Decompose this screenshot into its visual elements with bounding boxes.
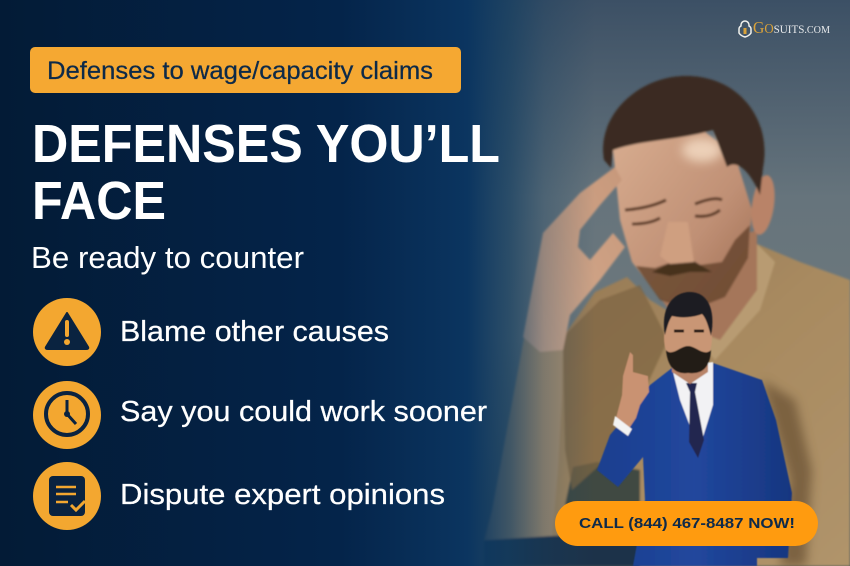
title (32, 114, 500, 231)
photo: man with headache (484, 76, 850, 566)
man's neck (640, 230, 757, 340)
logo (739, 18, 830, 37)
sweater shadow folds (563, 285, 668, 490)
subtitle: Be ready to counter (31, 240, 304, 275)
lawyer's hair (664, 292, 712, 336)
man's ear (748, 174, 778, 236)
man's sweater (484, 244, 850, 566)
lawyer's beard (666, 346, 711, 373)
sweater collar (690, 244, 775, 360)
jeans (484, 532, 640, 566)
lawyer's eyes (674, 330, 704, 332)
lawyer's neck (672, 355, 708, 384)
logo lock icon (739, 21, 751, 37)
man's mustache (652, 260, 712, 276)
man's hair (603, 76, 765, 195)
sleeve (486, 338, 563, 542)
man's hand (523, 167, 625, 352)
logo text: GOSUITS.COM (753, 18, 830, 37)
badge (30, 47, 461, 93)
call to action button: CALL (844) 467-8487 NOW! (579, 516, 795, 532)
item: blame other causes: Blame other causes (120, 316, 389, 348)
badge: Defenses to wage/capacity claims (47, 57, 433, 85)
sweater right shadow (762, 380, 812, 566)
lawyer's face (664, 306, 712, 370)
man's nose (660, 222, 694, 264)
item: say you could work sooner (33, 381, 487, 449)
lawyer's shirt (672, 362, 713, 450)
icon: warning triangle (33, 298, 101, 366)
icon: document check (33, 462, 101, 530)
lawyer's hand (616, 352, 649, 430)
wall gap under arm (565, 462, 640, 505)
lawyer's cuff (613, 416, 632, 436)
call to action button (555, 501, 818, 546)
icon: clock (33, 381, 101, 449)
lawyer figure (597, 292, 792, 566)
item: dispute expert opinions: Dispute expert opinions (120, 479, 445, 511)
lawyer's jacket (597, 363, 792, 566)
item: say you could work sooner: Say you could work sooner (120, 396, 487, 428)
title: DEFENSES YOU’LL (32, 114, 500, 174)
item: blame other causes (33, 298, 389, 366)
item: dispute expert opinions (33, 462, 445, 530)
brow and eye lines (625, 199, 722, 224)
man's face (613, 128, 752, 308)
title: FACE (32, 171, 166, 231)
lawyer's tie (686, 383, 704, 458)
forehead highlight (682, 138, 722, 162)
man's beard (636, 225, 750, 310)
